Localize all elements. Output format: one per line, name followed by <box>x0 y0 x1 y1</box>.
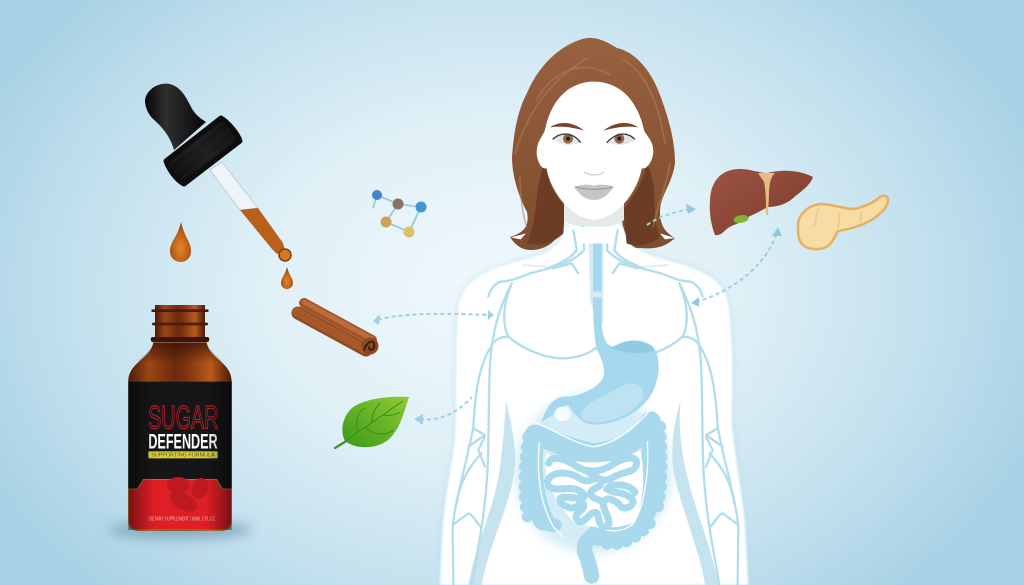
hair back <box>510 38 675 250</box>
torso side wedges <box>468 400 718 585</box>
molecule icon <box>372 190 426 238</box>
oil in dropper <box>240 208 285 254</box>
bottle shadow <box>108 521 252 539</box>
rubber bulb <box>145 84 206 150</box>
arrow: cinnamon to body <box>373 310 494 325</box>
yellow band: SUPPORTING FORMULA <box>151 453 215 459</box>
human body figure <box>440 225 748 585</box>
bottom caption: DIETARY SUPPLEMENT | 60ML 2 FL.OZ <box>148 516 215 522</box>
neck <box>564 197 624 226</box>
red capsules <box>166 475 211 516</box>
glass shading <box>128 382 232 530</box>
pancreas <box>798 196 888 249</box>
liver <box>710 169 813 235</box>
dropper tip <box>279 249 291 261</box>
lips <box>574 185 614 200</box>
eyes <box>553 134 637 145</box>
brand word DEFENDER: DEFENDER <box>148 429 218 453</box>
arrow: body to pancreas <box>691 227 782 307</box>
dropper <box>145 84 291 261</box>
black label <box>128 382 232 488</box>
esophagus and stomach <box>542 233 659 424</box>
hair shadow strands <box>511 58 675 245</box>
nose <box>584 172 604 175</box>
large intestine <box>524 411 662 576</box>
oil drop large <box>170 222 191 262</box>
shoulder shading <box>135 342 225 363</box>
amber glass <box>128 342 232 531</box>
glass tube <box>210 162 258 210</box>
arrow: to liver <box>647 204 696 225</box>
brand word SUGAR: SUGAR <box>148 398 219 435</box>
face <box>537 82 653 220</box>
hair and face <box>511 58 675 245</box>
cinnamon stick <box>297 302 378 354</box>
ribbed cap <box>166 118 240 184</box>
bottle neck <box>151 305 209 342</box>
arrow: leaf <box>414 397 472 425</box>
blood vessels <box>453 225 738 585</box>
small intestine <box>545 451 643 527</box>
abdomen glow <box>515 393 672 553</box>
oil drop small <box>281 267 293 289</box>
green leaf <box>335 397 409 448</box>
eyebrows <box>550 123 638 131</box>
red label band <box>128 479 232 530</box>
product bottle <box>128 305 232 531</box>
